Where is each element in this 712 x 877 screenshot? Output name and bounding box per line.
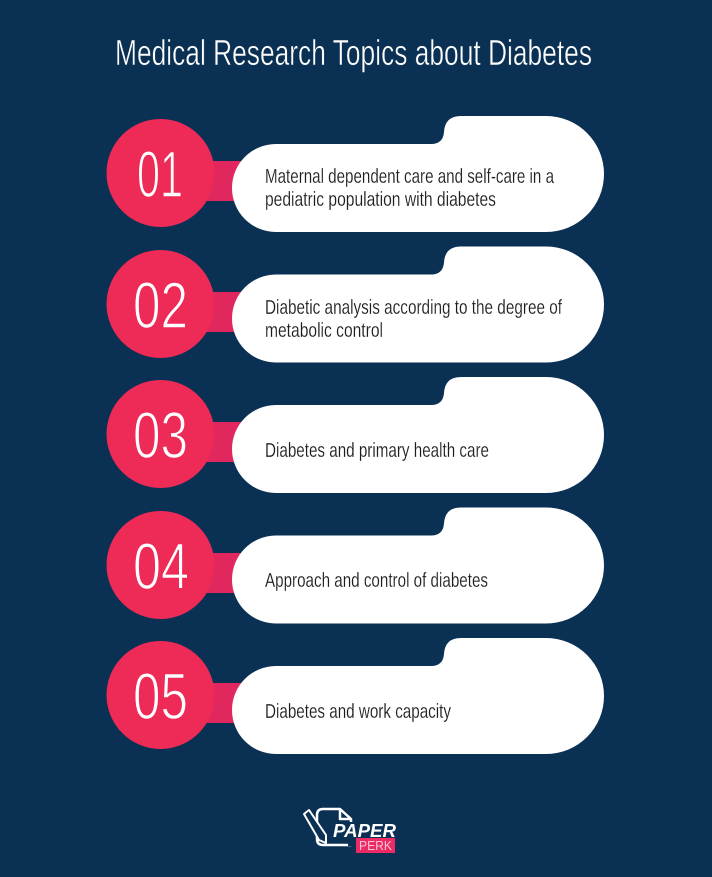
logo badge: perk: PERK [359, 839, 393, 853]
logo [304, 809, 396, 853]
connector 4 [205, 553, 250, 593]
number 3: 03 [133, 398, 188, 472]
card 4 [232, 508, 604, 624]
card text 1: Maternal dependent care and self-care in a [265, 165, 554, 188]
card text 4: Approach and control of diabetes [265, 569, 488, 592]
number circle 3 [106, 380, 214, 488]
number 2: 02 [133, 268, 188, 342]
card text 2 [265, 296, 562, 342]
connector 2 [205, 292, 250, 332]
item 4 [106, 508, 604, 624]
icon: document [317, 809, 351, 845]
number 4: 04 [133, 529, 189, 603]
card text 1 [265, 165, 554, 211]
card text 3: Diabetes and primary health care [265, 439, 489, 462]
item 1 [106, 116, 604, 232]
connector 3 [205, 422, 250, 462]
item 5 [106, 638, 604, 754]
item 2 [106, 246, 604, 362]
card 3 [232, 377, 604, 493]
card text 5: Diabetes and work capacity [265, 700, 452, 723]
number 1: 01 [137, 137, 183, 211]
number circle 1 [106, 119, 214, 227]
connector 1 [205, 161, 250, 201]
card 2 [232, 246, 604, 362]
card text 2: Diabetic analysis according to the degree of [265, 296, 562, 319]
connector 5 [205, 683, 250, 723]
card 5 [232, 638, 604, 754]
number circle 5 [106, 641, 214, 749]
card text 2: metabolic control [265, 319, 383, 342]
number circle 4 [106, 511, 214, 619]
logo word: paper: PAPER [333, 821, 396, 841]
card text 1: pediatric population with diabetes [265, 188, 496, 211]
item 3 [106, 377, 604, 493]
number circle 2 [106, 250, 214, 358]
icon: pencil [304, 810, 326, 843]
number 5: 05 [133, 659, 188, 733]
card 1 [232, 116, 604, 232]
